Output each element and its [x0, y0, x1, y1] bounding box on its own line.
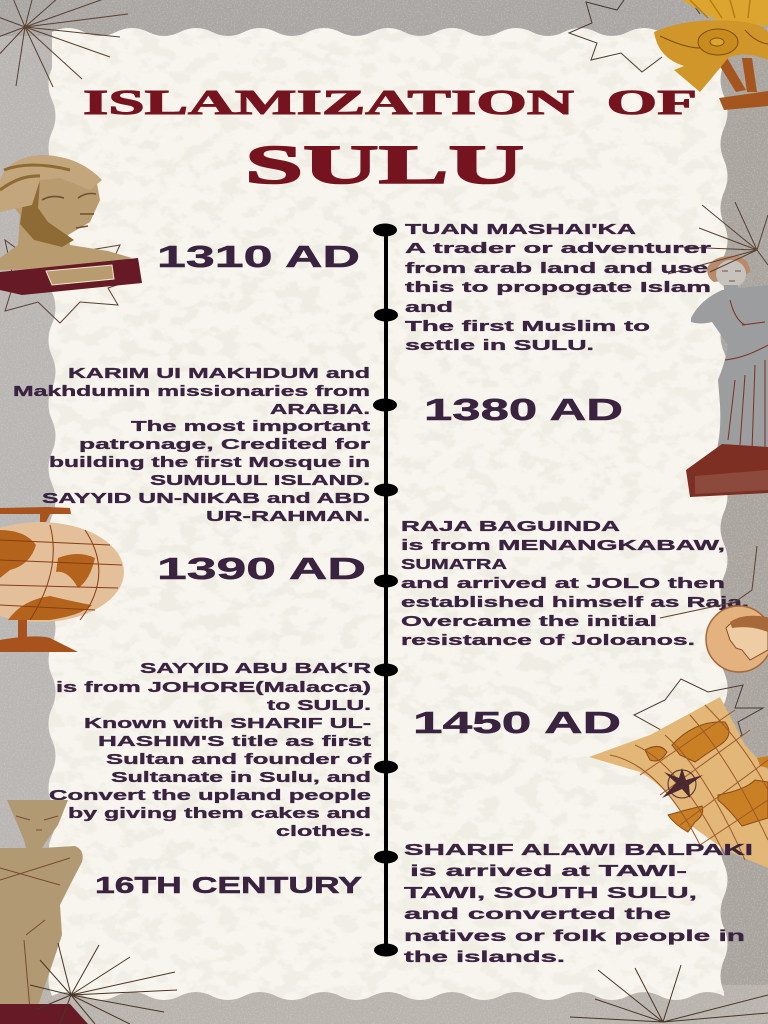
text block: Sayyid Abu Bak'r: is from JOHORE(Malacca) [56, 680, 371, 696]
star outline: behind helmet [569, 0, 700, 72]
text block: Karim ul Makhdum [13, 366, 371, 525]
text block: Karim ul Makhdum: patronage, Credited for [79, 437, 371, 453]
text block: Karim ul Makhdum: Makhdumin missionaries from [13, 384, 370, 400]
text block: Sayyid Abu Bak'r: clothes. [276, 824, 371, 840]
text block: Raja Baguinda [401, 519, 749, 649]
text block: Sayyid Abu Bak'r: Convert the upland people [49, 788, 371, 804]
starburst: bottom left [30, 943, 177, 1024]
icon: coin [706, 606, 768, 672]
text block: Sayyid Abu Bak'r [49, 661, 372, 840]
text block: Karim ul Makhdum: ARABIA. [270, 402, 370, 418]
text block: Karim ul Makhdum: The most important [131, 419, 370, 435]
text block: Sharif Alawi Balpaki [404, 842, 753, 966]
text block: Raja Baguinda: Overcame the initial [401, 614, 657, 630]
text block: Sayyid Abu Bak'r: Sultanate in Sulu, and [111, 770, 371, 786]
icon: classical bust on pedestal [0, 155, 142, 295]
text block: Sayyid Abu Bak'r: Sultan and founder of [106, 752, 371, 768]
text block: Sayyid Abu Bak'r: by giving them cakes and [68, 806, 371, 822]
icon: golden helmet on stand [654, 0, 768, 110]
text block: Sayyid Abu Bak'r: HASHIM'S title as first [98, 734, 371, 750]
icon: treasure map [589, 697, 768, 868]
text block: Karim ul Makhdum: SUMULUL ISLAND. [150, 473, 370, 489]
text block: Karim ul Makhdum: UR-RAHMAN. [206, 509, 370, 525]
text block: Raja Baguinda: SUMATRA [401, 557, 508, 573]
text block: Karim ul Makhdum: building the first Mosque in [49, 455, 370, 471]
text block: Sharif Alawi Balpaki: and converted the [404, 906, 671, 923]
year: 1390 AD: 1390 AD [157, 551, 366, 586]
text block: Tuan Mashai'ka: A trader or adventurer [405, 241, 712, 257]
star outline: behind map [634, 679, 763, 760]
text block: Tuan Mashai'ka [405, 222, 712, 354]
starburst: bottom right [570, 965, 768, 1022]
text block: Sayyid Abu Bak'r: SAYYID ABU BAK'R [140, 661, 372, 677]
timeline [373, 224, 398, 956]
text block: Raja Baguinda: and arrived at JOLO then [401, 576, 725, 592]
year: 1380 AD: 1380 AD [424, 392, 623, 427]
icon: grey statue [686, 256, 768, 497]
text block: Sharif Alawi Balpaki: the islands. [404, 949, 565, 966]
text block: Sayyid Abu Bak'r: Known with SHARIF UL- [84, 716, 371, 732]
starburst: right [668, 202, 768, 274]
text block: Raja Baguinda: established himself as Raja. [401, 595, 749, 611]
text block: Sharif Alawi Balpaki: TAWI, SOUTH SULU, [404, 885, 697, 902]
title [83, 83, 697, 195]
text block: Tuan Mashai'ka: this to propogate Islam [405, 280, 711, 296]
text block: Sharif Alawi Balpaki: is arrived at TAWI- [410, 863, 687, 880]
title: ISLAMIZATION OF [83, 83, 697, 122]
text block: Tuan Mashai'ka: and [405, 300, 453, 316]
year: 1450 AD: 1450 AD [413, 705, 621, 740]
icon: globe [0, 507, 124, 652]
text block: Karim ul Makhdum: KARIM UI MAKHDUM and [68, 366, 370, 382]
text block: Raja Baguinda: is from MENANGKABAW, [401, 538, 725, 554]
text block: Tuan Mashai'ka: The first Muslim to [405, 319, 650, 335]
starburst: top left [0, 0, 128, 87]
year: 16th century: 16TH CENTURY [95, 872, 362, 898]
text block: Raja Baguinda: RAJA BAGUINDA [401, 519, 621, 535]
star outline: behind bust [5, 240, 138, 323]
text block: Tuan Mashai'ka: from arab land and use [405, 261, 708, 277]
text block: Sayyid Abu Bak'r: to SULU. [267, 698, 371, 714]
star outline: near coin [660, 546, 757, 618]
text block: Sharif Alawi Balpaki: SHARIF ALAWI BALPAKI [404, 842, 753, 859]
icon: clay idol figure [0, 800, 88, 1024]
text block: Raja Baguinda: resistance of Joloanos. [401, 633, 695, 649]
year: 1310 AD: 1310 AD [157, 239, 360, 274]
text block: Tuan Mashai'ka: settle in SULU. [405, 338, 594, 354]
text block: Tuan Mashai'ka: TUAN MASHAI'KA [405, 222, 637, 238]
text block: Karim ul Makhdum: SAYYID UN-NIKAB and ABD [42, 491, 370, 507]
title: SULU [245, 134, 524, 195]
text block: Sharif Alawi Balpaki: natives or folk people in [404, 928, 745, 945]
